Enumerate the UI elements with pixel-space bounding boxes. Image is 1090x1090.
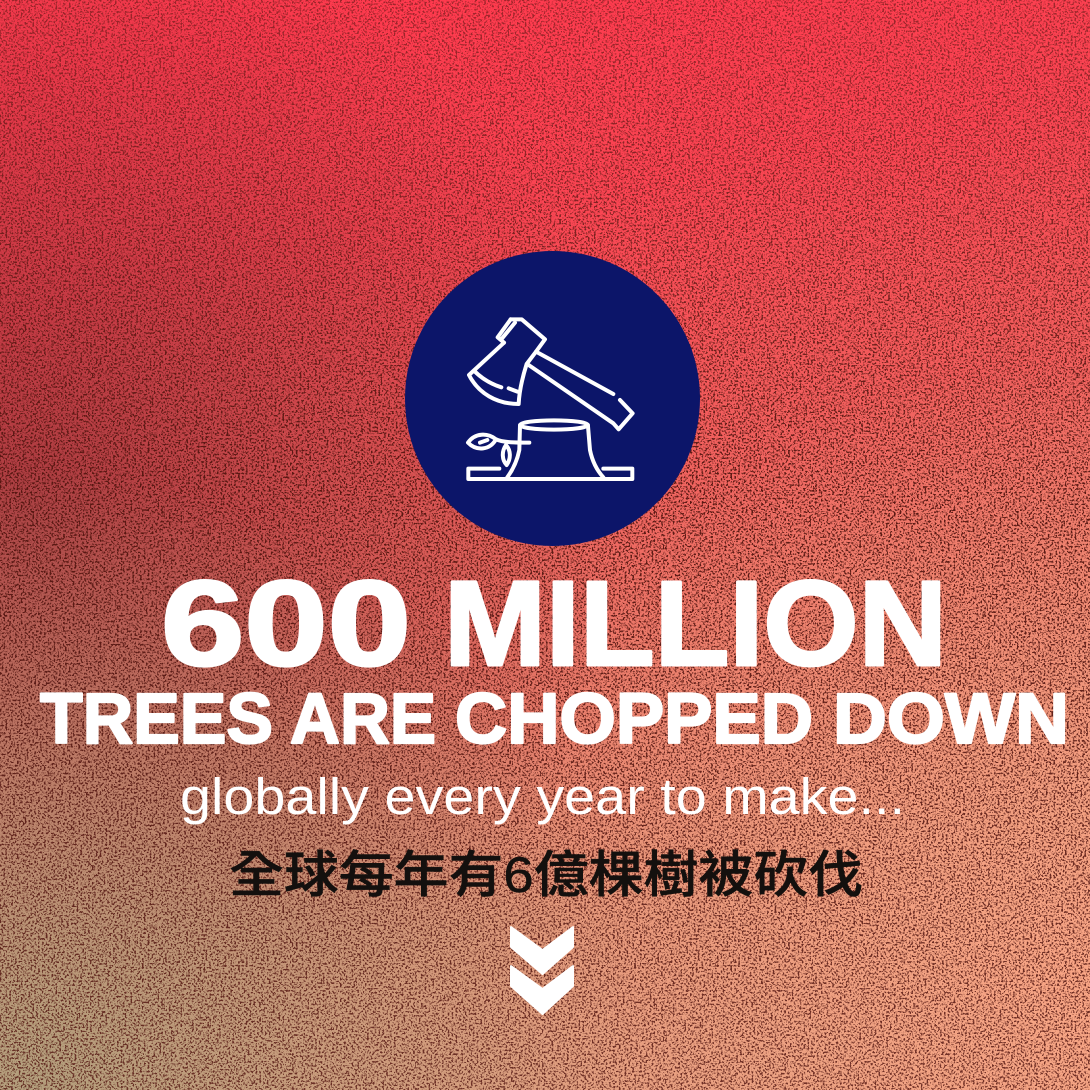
subheading: trees are chopped down: CHOPPED xyxy=(455,680,813,759)
subheading: trees are chopped down: DOWN xyxy=(833,680,1069,759)
text: globally every year to make: globally every year to make... xyxy=(180,768,905,825)
text: chinese translation: 全球每年有6億棵樹被砍伐 xyxy=(229,847,863,903)
subheading: trees are chopped down: TREES xyxy=(40,680,273,759)
icon: stump and leaf xyxy=(468,420,632,479)
headline: 600 million xyxy=(161,555,947,691)
icon: axe and tree stump in navy circle xyxy=(405,251,700,546)
headline: 600 million: MILLION xyxy=(444,555,947,691)
icon: double chevron down arrow xyxy=(511,927,573,1014)
subheading: trees are chopped down: ARE xyxy=(290,680,436,759)
navy circle xyxy=(405,251,700,546)
subheading: trees are chopped down xyxy=(40,680,1069,759)
headline: 600 million: 600 xyxy=(161,555,411,691)
icon: axe xyxy=(469,319,633,429)
